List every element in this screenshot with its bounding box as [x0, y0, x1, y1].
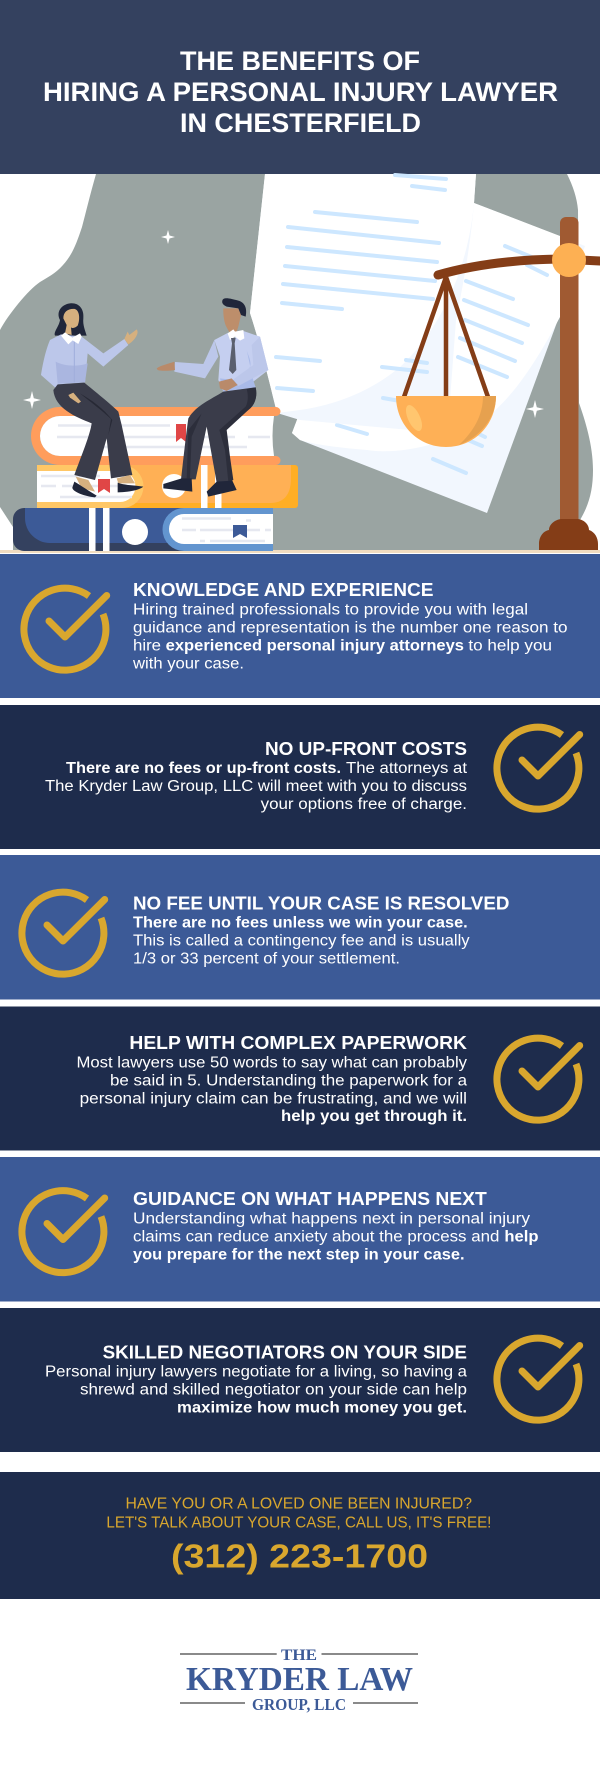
text block: no fee until your case is resolved: 1/3 or 33 percent of your settlement. — [133, 950, 400, 967]
top orange book — [31, 407, 280, 465]
text block: knowledge and experience: Hiring trained professionals to provide you with legal — [133, 601, 528, 618]
call to action text: LET'S TALK ABOUT YOUR CASE, CALL US, IT'S FREE! — [106, 1515, 491, 1532]
title: THE BENEFITS OF — [180, 46, 420, 76]
icon: check mark in circle — [497, 1338, 580, 1420]
call to action text: HAVE YOU OR A LOVED ONE BEEN INJURED? — [126, 1496, 472, 1513]
heading: no up-front costs: NO UP-FRONT COSTS — [265, 739, 467, 759]
text block: knowledge and experience — [132, 601, 568, 672]
title: IN CHESTERFIELD — [180, 108, 421, 138]
text block: skilled negotiators on your side: maximize how much money you get. — [177, 1399, 467, 1416]
panel: guidance on what happens next — [0, 1157, 600, 1302]
panel: skilled negotiators on your side — [0, 1308, 600, 1452]
panel: help with complex paperwork — [0, 1006, 600, 1150]
text block: guidance on what happens next — [133, 1210, 538, 1263]
heading: no fee until your case is resolved: NO FEE UNTIL YOUR CASE IS RESOLVED — [133, 893, 509, 913]
scales of justice — [396, 217, 600, 550]
title — [43, 46, 558, 138]
logo: The Kryder Law Group, LLC — [180, 1647, 418, 1714]
text block: no up-front costs: The Kryder Law Group, LLC will meet with you to discuss — [45, 778, 467, 795]
heading: knowledge and experience: KNOWLEDGE AND EXPERIENCE — [133, 580, 434, 600]
call to action text — [106, 1496, 491, 1532]
panel: call to action — [0, 1472, 600, 1599]
heading: skilled negotiators on your side: SKILLED NEGOTIATORS ON YOUR SIDE — [103, 1342, 467, 1362]
text block: guidance on what happens next: help — [504, 1228, 538, 1245]
text block: help with complex paperwork: be said in 5. Understanding the paperwork for a — [110, 1072, 467, 1089]
back paper sheet — [292, 203, 585, 513]
heading: help with complex paperwork: HELP WITH COMPLEX PAPERWORK — [129, 1033, 467, 1053]
front paper sheet — [250, 174, 476, 430]
sparkles — [23, 230, 544, 418]
middle yellow book — [37, 465, 298, 508]
header band with title — [0, 0, 600, 174]
text block: no up-front costs: your options free of charge. — [261, 796, 467, 813]
bottom blue book — [13, 508, 273, 551]
text block: no up-front costs — [45, 760, 468, 813]
text block: help with complex paperwork: personal injury claim can be frustrating, and we will — [80, 1090, 467, 1107]
phone number: (312) 223-1700 — [171, 1537, 428, 1574]
text block: no up-front costs: There are no fees or up-front costs. — [66, 760, 341, 777]
text block: no fee until your case is resolved: There are no fees unless we win your case. — [133, 914, 468, 931]
text block: guidance on what happens next: you prepare for the next step in your case. — [133, 1246, 465, 1263]
icon: check mark in circle — [22, 1191, 105, 1273]
text block: no fee until your case is resolved: This is called a contingency fee and is usually — [133, 932, 470, 949]
icon: check mark in circle — [24, 588, 107, 670]
text block: knowledge and experience: with your case. — [132, 655, 244, 672]
panel: no up-front costs — [0, 705, 600, 849]
panel: knowledge and experience — [0, 554, 600, 698]
text block: knowledge and experience: to help you — [468, 637, 552, 654]
panel: no fee until your case is resolved — [0, 855, 600, 1000]
text block: knowledge and experience: hire — [133, 637, 161, 654]
text block: knowledge and experience: guidance and representation is the number one reason to — [133, 619, 568, 636]
ground strip — [0, 550, 600, 553]
man figure — [157, 298, 268, 497]
heading: guidance on what happens next: GUIDANCE ON WHAT HAPPENS NEXT — [133, 1189, 487, 1209]
text block: no up-front costs: The attorneys at — [346, 760, 468, 777]
woman figure — [41, 303, 143, 497]
text block: skilled negotiators on your side: shrewd and skilled negotiator on your side can help — [80, 1381, 467, 1398]
icon: check mark in circle — [497, 727, 580, 809]
logo: The Kryder Law Group, LLC: GROUP, LLC — [252, 1695, 346, 1714]
logo: The Kryder Law Group, LLC: KRYDER LAW — [186, 1661, 413, 1698]
text block: help with complex paperwork — [76, 1054, 467, 1125]
text block: no fee until your case is resolved — [133, 914, 470, 967]
logo: The Kryder Law Group, LLC: THE — [281, 1647, 317, 1664]
text block: help with complex paperwork: Most lawyers use 50 words to say what can probably — [76, 1054, 467, 1071]
text block: guidance on what happens next: Understanding what happens next in personal injury — [133, 1210, 530, 1227]
grey background blob — [0, 174, 593, 550]
text block: guidance on what happens next: claims can reduce anxiety about the process and — [133, 1228, 499, 1245]
text block: skilled negotiators on your side — [45, 1364, 467, 1416]
text block: help with complex paperwork: help you get through it. — [281, 1108, 467, 1125]
title: HIRING A PERSONAL INJURY LAWYER — [43, 77, 558, 107]
text block: knowledge and experience: experienced personal injury attorneys — [166, 637, 464, 654]
stack of books — [13, 407, 298, 551]
illustration: lawyers on books with scales of justice — [0, 174, 600, 553]
text block: skilled negotiators on your side: Personal injury lawyers negotiate for a living, so having a — [45, 1364, 467, 1380]
icon: check mark in circle — [22, 892, 105, 974]
icon: check mark in circle — [497, 1038, 580, 1120]
